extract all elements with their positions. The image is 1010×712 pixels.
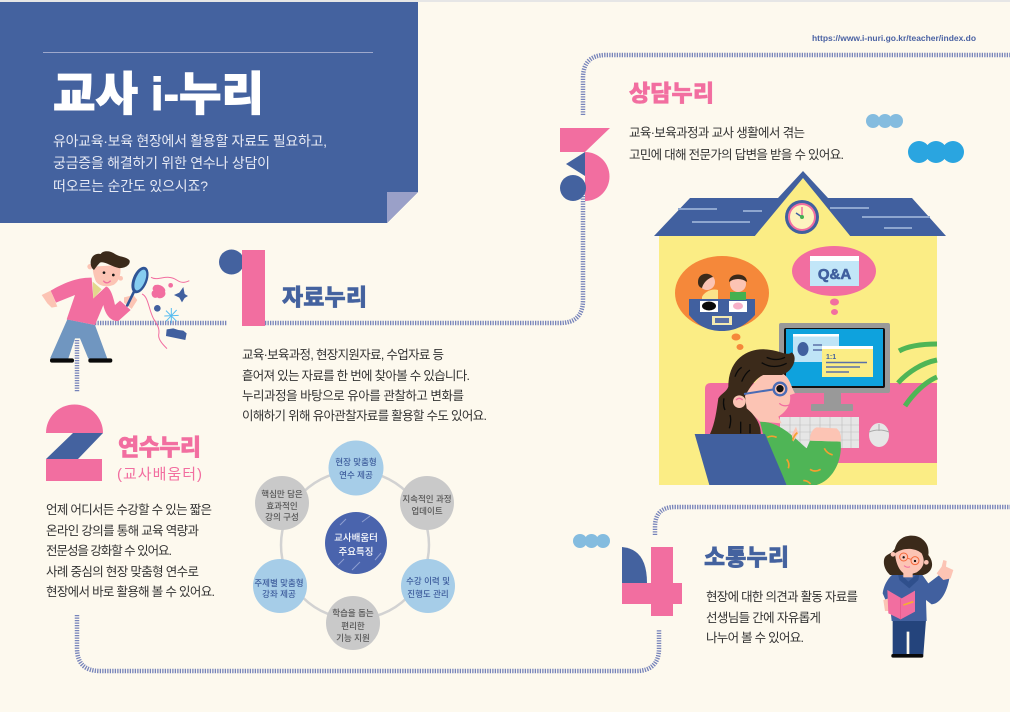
intro text bbox=[53, 133, 327, 194]
intro text: 유아교육·보육 현장에서 활용할 자료도 필요하고, bbox=[53, 133, 327, 149]
section 4 text: 나누어 볼 수 있어요. bbox=[706, 631, 804, 645]
section 2 text: 현장에서 바로 활용해 볼 수 있어요. bbox=[46, 585, 215, 599]
node: bottom: 편리한 bbox=[341, 621, 365, 631]
center node: 교사배움터 bbox=[334, 532, 378, 544]
monitor bbox=[779, 323, 890, 411]
section 1 text: 흩어져 있는 자료를 한 번에 찾아볼 수 있습니다. bbox=[242, 368, 470, 383]
node: lower right bbox=[401, 559, 455, 613]
node: lower left bbox=[253, 559, 307, 613]
node: lower left: 강좌 제공 bbox=[262, 589, 296, 599]
node: lower left: 주제별 맞춤형 bbox=[254, 578, 304, 588]
node: top: 연수 제공 bbox=[339, 470, 373, 480]
section 3 text: 교육·보육과정과 교사 생활에서 겪는 bbox=[629, 126, 805, 140]
decorative bubbles near section 4 bbox=[573, 534, 610, 548]
center node: 주요특징 bbox=[339, 547, 373, 558]
section 4 heading: 소통누리 bbox=[704, 544, 789, 570]
illustration: man with magnifier bbox=[42, 251, 189, 363]
number 1 bbox=[219, 250, 265, 326]
node: bottom bbox=[326, 596, 380, 650]
node: upper left bbox=[255, 476, 309, 530]
section 3 text bbox=[629, 126, 844, 162]
center node bbox=[325, 512, 387, 574]
section 4 text bbox=[706, 590, 858, 645]
node: lower right: 진행도 관리 bbox=[407, 589, 449, 599]
intro text: 궁금증을 해결하기 위한 연수나 상담이 bbox=[53, 155, 270, 171]
section 1 text: 교육·보육과정, 현장지원자료, 수업자료 등 bbox=[242, 348, 444, 362]
desk bbox=[705, 383, 937, 463]
illustration: teacher with book bbox=[883, 536, 953, 658]
section 1 text: 이해하기 위해 유아관찰자료를 활용할 수도 있어요. bbox=[242, 409, 487, 423]
decorative bubbles bbox=[866, 114, 964, 163]
number 4 bbox=[622, 547, 682, 616]
thought bubble: Q&A bbox=[792, 246, 876, 315]
section 2 text: 온라인 강의를 통해 교육 역량과 bbox=[46, 524, 199, 538]
section 3 text: 고민에 대해 전문가의 답변을 받을 수 있어요. bbox=[629, 148, 844, 162]
section 3 heading: 상담누리 bbox=[629, 80, 714, 106]
number 3 bbox=[560, 128, 610, 201]
folded corner bbox=[387, 192, 418, 223]
node: upper left: 핵심만 담은 bbox=[261, 489, 303, 499]
node: lower right: 수강 이력 및 bbox=[406, 576, 450, 586]
intro text: 떠오르는 순간도 있으시죠? bbox=[53, 178, 208, 194]
section 1 text bbox=[242, 348, 487, 423]
node: bottom: 학습을 돕는 bbox=[332, 608, 374, 618]
title: 교사 i-누리 bbox=[53, 68, 264, 120]
dashed connector path bbox=[77, 55, 1010, 671]
illustration: house with teacher at computer bbox=[654, 171, 946, 485]
node: upper right bbox=[400, 476, 454, 530]
section 4 text: 선생님들 간에 자유롭게 bbox=[706, 611, 821, 625]
teacher bbox=[695, 349, 841, 485]
number 2 bbox=[46, 404, 103, 481]
section 2 subheading: (교사배움터) bbox=[117, 466, 202, 483]
section 1 text: 누리과정을 바탕으로 유아를 관찰하고 변화를 bbox=[242, 389, 464, 403]
node: top: 현장 맞춤형 bbox=[335, 457, 377, 467]
mouse bbox=[869, 423, 889, 447]
thought bubble: children bbox=[675, 256, 769, 331]
node: upper left: 강의 구성 bbox=[265, 512, 299, 522]
roof bbox=[654, 171, 946, 237]
section 1 heading: 자료누리 bbox=[282, 284, 367, 310]
wifi arcs bbox=[898, 344, 937, 406]
header panel bbox=[0, 2, 418, 223]
orange thought dots bbox=[732, 334, 744, 350]
thought bubble: Q&A: Q&A bbox=[818, 266, 851, 283]
section 2 text: 언제 어디서든 수강할 수 있는 짧은 bbox=[46, 503, 212, 517]
node: upper right: 업데이트 bbox=[411, 506, 443, 516]
section 2 heading: 연수누리 bbox=[118, 434, 201, 460]
section 2 text bbox=[46, 503, 215, 599]
feature cycle diagram bbox=[253, 440, 455, 650]
clock bbox=[785, 200, 819, 234]
section 2 text: 사례 중심의 현장 맞춤형 연수로 bbox=[46, 565, 199, 579]
keyboard bbox=[780, 417, 859, 448]
monitor: 1:1 bbox=[826, 354, 836, 361]
website url: https://www.i-nuri.go.kr/teacher/index.do bbox=[812, 34, 976, 43]
node: upper right: 지속적인 과정 bbox=[402, 494, 452, 504]
node: bottom: 기능 지원 bbox=[336, 633, 370, 643]
section 2 text: 전문성을 강화할 수 있어요. bbox=[46, 544, 172, 558]
node: top bbox=[328, 440, 384, 496]
section 4 text: 현장에 대한 의견과 활동 자료를 bbox=[706, 590, 858, 604]
node: upper left: 효과적인 bbox=[266, 501, 298, 511]
